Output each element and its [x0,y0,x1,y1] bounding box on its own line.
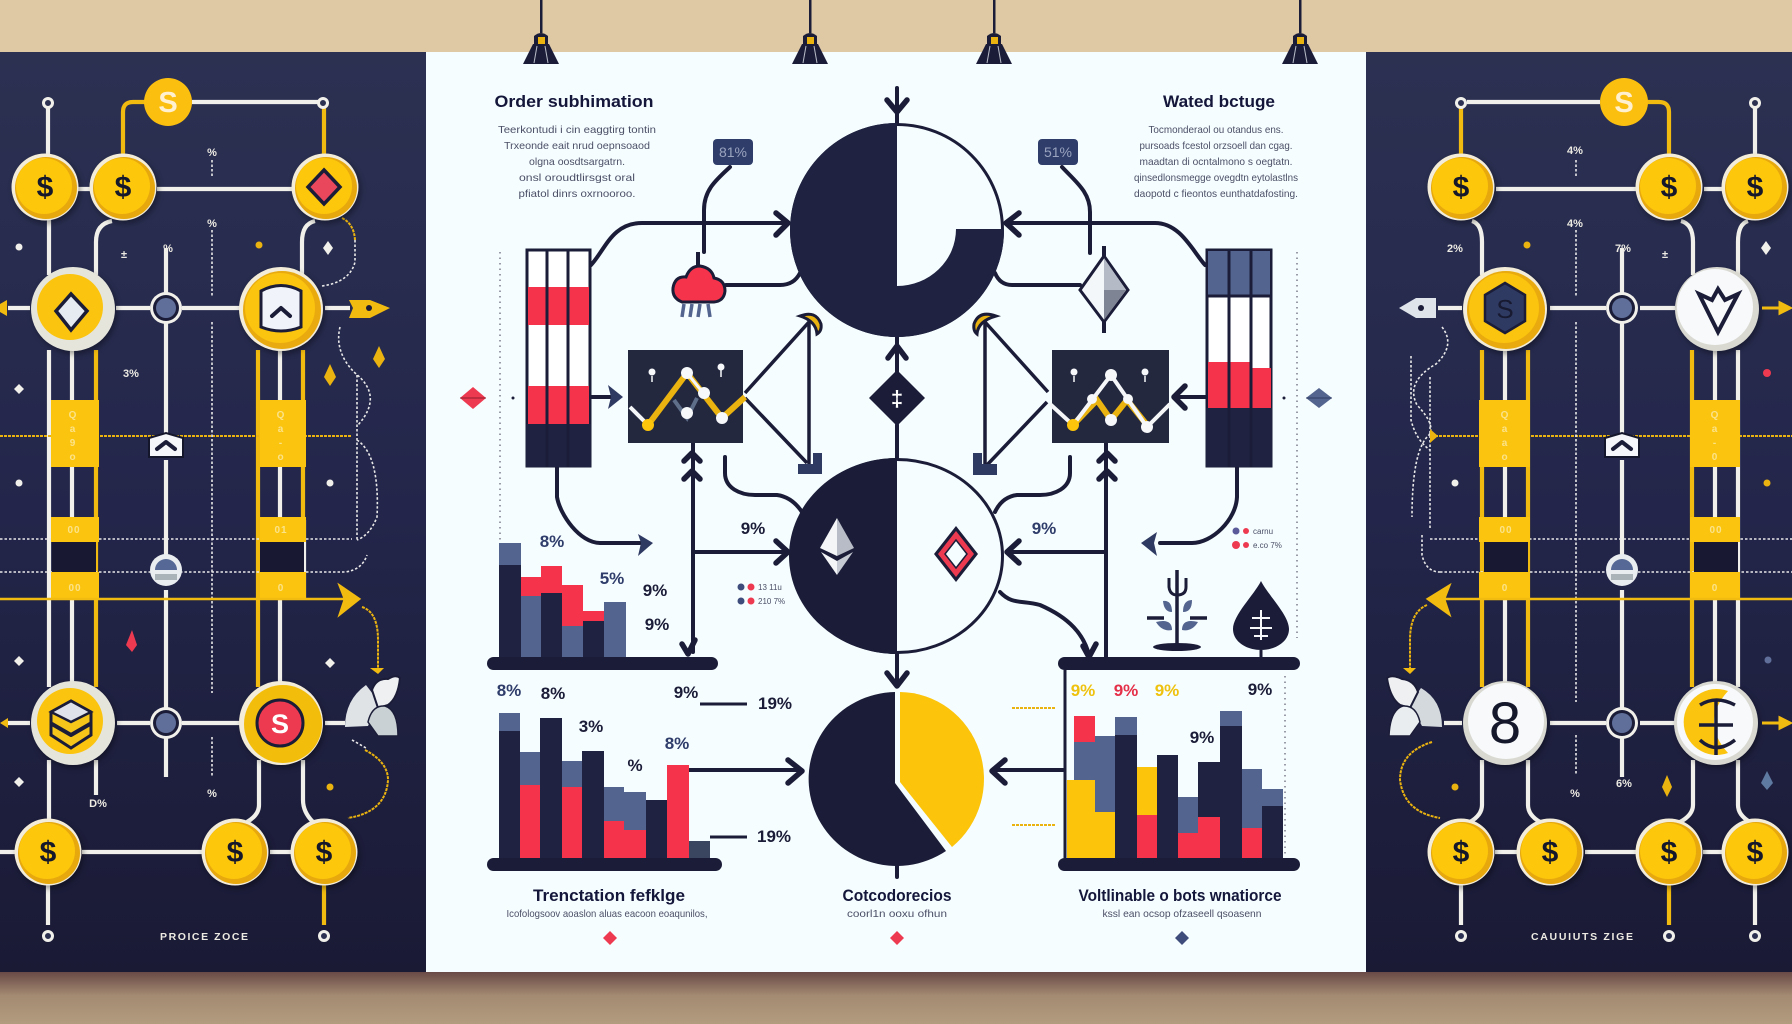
lamp 1 [523,0,559,64]
line chart left [628,350,745,443]
right panel micro labels: 6% [1616,778,1632,790]
top dollar coin [144,78,192,126]
big coin: red s: S [271,709,289,739]
left yellow value blocks: 0 [278,583,284,594]
big coin: white eight: 8 [1489,691,1521,756]
right yellow value blocks: Q [1711,410,1719,421]
bar chart 3 [1012,657,1300,871]
bar chart 1 [487,532,718,670]
legend right: carnu [1253,527,1273,536]
left panel micro labels: D% [89,798,107,810]
left yellow value blocks: 01 [274,525,288,536]
vertical feeders [693,443,1106,657]
node bottom [1606,707,1638,739]
bar chart 2: 19% [757,827,791,846]
badge: left percentage: 81% [719,144,747,160]
big coin: white V [1675,267,1759,351]
body copy right: pursoads fcestol orzsoell dan cgag. [1140,140,1292,152]
left yellow value blocks: - [279,438,283,449]
right panel micro labels [1447,145,1668,800]
icon: gray diamond [1080,246,1128,333]
coin row top: $ [1747,171,1764,204]
panel: central white sheet [426,52,1366,972]
footer: center caption: Cotcodorecios [842,886,952,905]
arrow into top circle left [591,223,786,265]
body copy left: Trxeonde eait nrud oepnsoaod [504,140,650,152]
footer: chart 3 caption: kssl ean ocsop ofzaseell qsoasenn [1102,908,1262,920]
coin row top: $ [1661,171,1678,204]
hanging lamps [523,0,1318,64]
diamond node: ‡ [891,386,903,411]
coin row bottom: $ [1453,836,1470,869]
badge connectors [704,167,730,252]
right panel micro labels: 4% [1567,218,1583,230]
chevron tag [1605,433,1639,457]
left yellow value blocks: Q [69,410,77,421]
right panel micro labels: 7% [1615,243,1631,255]
icon: drop [1233,581,1289,657]
right panel small markers [1430,241,1773,797]
bar chart 1: 8% [540,532,564,551]
left yellow value blocks [51,400,306,600]
legend left [738,583,785,606]
right yellow value blocks: 0 [1712,452,1718,463]
right dotted guides [1400,160,1792,818]
top dollar coin [1600,78,1648,126]
icon: red diamond [934,526,978,582]
left yellow value blocks: Q [277,410,285,421]
big coin: red s [239,681,323,765]
lamp 2 [792,0,828,64]
heading: order subhimation [494,92,656,200]
coin row bottom: $ [1542,836,1559,869]
coin row top: $ [115,171,132,204]
bar chart 2: 8% [665,734,689,753]
left yellow value blocks: 00 [68,583,82,594]
coin row bottom: $ [316,836,333,869]
right yellow value blocks: Q [1501,410,1509,421]
legend left: 13 11u [758,583,782,592]
legend left: 210 7% [758,597,785,606]
bar chart 3: 9% [1071,681,1095,700]
big coin: hexagon S [1463,267,1547,351]
right yellow value blocks: o [1501,452,1509,463]
bar chart 1: 9% [643,581,667,600]
heading: wated bctuge [1134,92,1298,200]
bar chart 3: 9% [1114,681,1138,700]
panel: left dark flow [0,52,426,972]
right yellow value blocks: a [1502,438,1508,449]
big coin: diamond [31,267,115,351]
bar chart 1: 5% [600,569,624,588]
percent labels and legends mid: 9% [741,519,765,538]
bar chart 2: 8% [541,684,565,703]
arrows and leaf icons [1387,298,1790,736]
left panel micro labels [89,147,217,810]
left panel micro labels: 3% [123,368,139,380]
bar chart 2 [487,681,792,871]
left panel micro labels: % [207,147,217,159]
bar chart 2: 19% [758,694,792,713]
footer: chart 1 caption: Icofologsoov aoaslon aluas eacoon eoaqunilos, [506,908,708,920]
footer: center caption: coorl1n ooxu ofhun [847,908,947,920]
left yellow value blocks: 9 [70,438,76,449]
footer: chart 3 caption: Voltlinable o bots wnatiorce [1078,886,1282,905]
left connector lines [0,102,350,925]
coin row bottom: $ [1661,836,1678,869]
footer: chart 3 caption [1078,886,1282,945]
badge: left percentage [713,139,753,165]
pie arrows [689,768,798,772]
big coin: hexagon S: S [1496,294,1514,324]
left panel caption: PROICE ZOCE [160,931,248,943]
bar chart 2: % [627,756,643,775]
node top [1606,292,1638,324]
node top [150,292,182,324]
icon: red cloud [673,252,725,317]
left yellow arrow [0,586,359,614]
half node [1606,554,1638,586]
body copy left [498,124,656,200]
right yellow value blocks [1479,400,1740,600]
right yellow value blocks: 0 [1712,583,1718,594]
left dotted guides [0,160,388,818]
stacked column left [526,250,591,467]
body copy left: onsl oroudtlirsgst oral [519,172,635,184]
coin row bottom [14,818,358,886]
lamp 3 [976,0,1012,64]
percent labels and legends mid: 9% [1032,519,1056,538]
icon: ethereum [820,518,854,575]
node bottom [150,707,182,739]
right panel caption: CAUUIUTS ZIGE [1531,931,1633,943]
right yellow value blocks: a [1502,424,1508,435]
connector rings [44,98,328,940]
triangle left [745,322,809,467]
right yellow arrow [1428,586,1792,614]
top dollar coin: S [158,87,178,119]
diamond node [869,370,925,426]
big coin: stack [31,681,115,765]
badge: right percentage: 51% [1044,144,1072,160]
stacked column right [1206,250,1272,467]
triangle right [985,322,1048,468]
left yellow value blocks: 00 [67,525,81,536]
badge: right percentage [1038,139,1078,165]
coin row bottom: $ [227,836,244,869]
body copy left: olgna oosdtsargatrn. [529,156,625,168]
footer: chart 1 caption: Trenctation fefklge [533,886,685,905]
left panel micro labels: % [207,788,217,800]
right panel micro labels: ± [1662,249,1668,261]
right yellow value blocks: 00 [1709,525,1723,536]
footer: chart 1 caption [506,886,708,945]
left yellow value blocks: a [70,424,76,435]
body copy right: qinsedlonsmegge ovegdtn eytolastlns [1134,172,1298,184]
heading: wated bctuge: Wated bctuge [1163,92,1275,111]
body copy right: maadtan di ocntalmono s oegtatn. [1140,156,1292,168]
left panel micro labels: % [207,218,217,230]
right panel micro labels: 4% [1567,145,1583,157]
right yellow value blocks: 0 [1502,583,1508,594]
floor band [0,972,1792,1024]
lamp 4 [1282,0,1318,64]
left panel micro labels: ± [121,249,127,261]
bar chart 2: 3% [579,717,603,736]
left yellow value blocks: o [69,452,77,463]
pie chart bottom [809,692,984,866]
heading: order subhimation: Order subhimation [494,92,654,111]
big coin: white eight [1463,681,1547,765]
legend right: e.co 7% [1253,541,1282,550]
big coin: half yellow [1674,681,1758,765]
coin row top: $ [37,171,54,204]
legend right [1232,527,1282,550]
top dollar coin: S [1614,87,1634,119]
body copy right: Tocmonderaol ou otandus ens. [1148,124,1284,136]
footer: center caption [842,886,952,945]
center connector arrows [557,88,1237,877]
body copy right: daopotd c fieontos eunthatdafosting. [1134,188,1298,200]
right panel micro labels: % [1570,788,1580,800]
body copy left: Teerkontudi i cin eaggtirg tontin [498,124,656,136]
bar chart 1: 9% [645,615,669,634]
side connectors [726,273,800,285]
chart feed curves [557,467,640,543]
body copy left: pfiatol dinrs oxrnooroo. [518,188,636,200]
right yellow value blocks: - [1713,438,1717,449]
coin row top [1428,154,1788,220]
coin row bottom: $ [1747,836,1764,869]
left yellow value blocks: a [278,424,284,435]
big coin: shield [239,267,323,351]
coin row bottom [1428,818,1788,886]
left panel micro labels: % [163,243,173,255]
stack to chart arrows [591,395,618,399]
coin row bottom: $ [40,836,57,869]
icon: plant [1147,570,1207,651]
panel: right dark flow [1366,52,1792,972]
percent labels and legends mid [738,519,1282,606]
right connector lines [1438,102,1755,925]
chevron tag [149,433,183,457]
right yellow value blocks: 00 [1499,525,1513,536]
coin row top: $ [1453,171,1470,204]
arrows and leaf icons [0,300,400,736]
bar chart 2: 9% [674,683,698,702]
right yellow value blocks: a [1712,424,1718,435]
half node [150,554,182,586]
bar chart 3: 9% [1155,681,1179,700]
coin row top [12,154,358,220]
split circle middle [789,458,1002,654]
left panel small markers [14,241,385,790]
bar chart 2: 8% [497,681,521,700]
right panel micro labels: 2% [1447,243,1463,255]
dotted rules and side diamonds [460,252,1332,638]
line chart right [1050,350,1170,443]
arrow into top circle right [1008,223,1205,265]
connector rings [1456,98,1760,940]
donut chart top [790,123,1004,337]
bar chart 3: 9% [1190,728,1214,747]
bar chart 3: 9% [1248,680,1272,699]
body copy right [1134,124,1298,200]
left yellow value blocks: o [277,452,285,463]
